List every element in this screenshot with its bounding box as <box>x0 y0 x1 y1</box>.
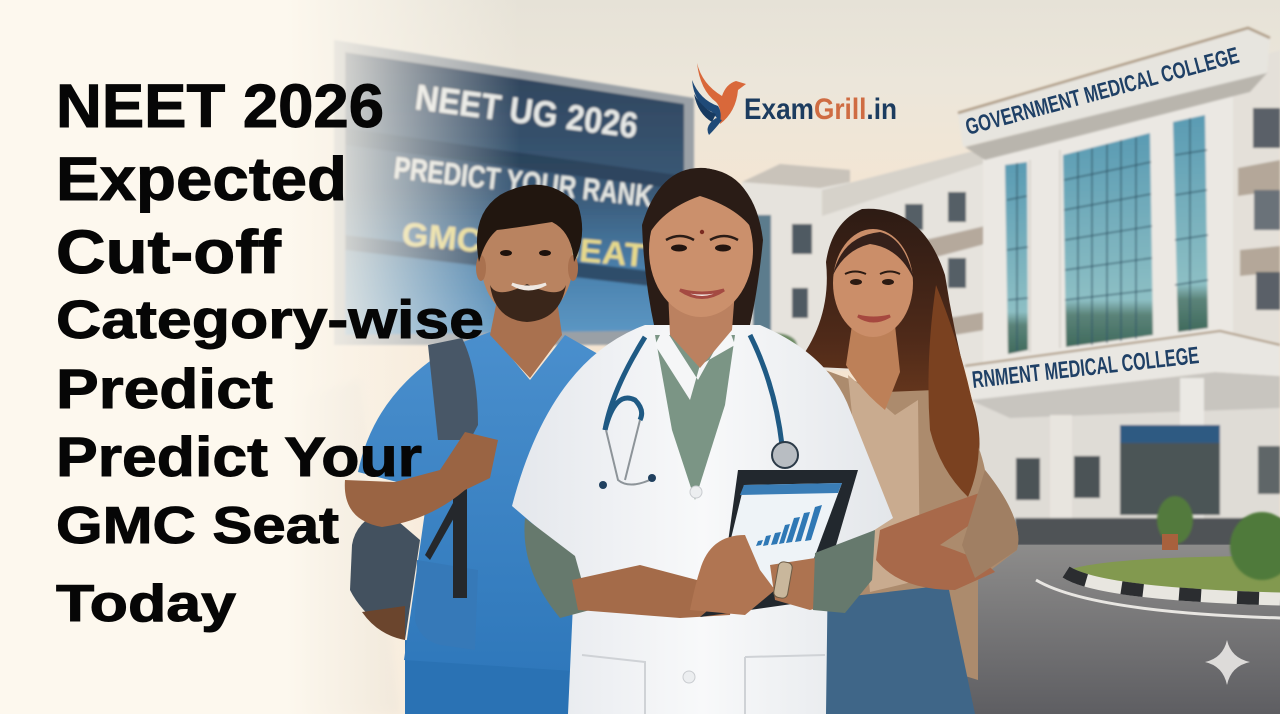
left wing <box>742 148 985 370</box>
road and garden <box>960 496 1280 714</box>
headline line 5: Predict <box>56 357 273 420</box>
neck <box>846 325 900 410</box>
headline line 4: Category-wise <box>56 290 484 350</box>
billboard text: GMC seat: GMC SEAT <box>400 215 647 274</box>
backpack <box>350 510 420 640</box>
sign band <box>958 28 1270 147</box>
crossed arms <box>876 490 995 590</box>
billboard text: predict your rank: PREDICT YOUR RANK <box>392 150 655 214</box>
head <box>649 183 753 317</box>
person: woman right <box>795 209 1018 714</box>
medical college building <box>742 28 1280 560</box>
right sleeve <box>813 530 875 613</box>
person: man left <box>345 185 640 714</box>
left sleeve <box>524 518 590 618</box>
headline line 6: Predict Your <box>56 425 422 488</box>
watch <box>773 561 793 599</box>
headline <box>56 72 484 633</box>
hair back <box>642 168 763 330</box>
person: centre doctor <box>512 168 893 714</box>
icon: phoenix bird <box>692 63 746 135</box>
jeans <box>815 585 975 714</box>
headline line 1: NEET 2026 <box>56 72 384 140</box>
headline line 3: Cut-off <box>56 218 282 286</box>
left cream fade <box>0 0 520 714</box>
arm and hand <box>345 432 498 527</box>
logo: ExamGrill.in <box>692 63 897 135</box>
headline line 2: Expected <box>56 145 347 213</box>
blurred billboard <box>334 40 694 345</box>
logo wordmark: ExamGrill.in <box>744 93 897 126</box>
shadow under sign band <box>965 72 1268 160</box>
coat pockets <box>582 655 825 714</box>
head <box>481 204 573 320</box>
icon: sparkle watermark <box>1205 640 1250 685</box>
tablet <box>700 470 858 617</box>
cardigan and top <box>815 370 1018 680</box>
scrub top <box>358 332 640 672</box>
headline line 8: Today <box>56 575 236 633</box>
main tower <box>958 28 1280 370</box>
coat buttons <box>690 486 702 498</box>
right forearm <box>770 556 846 610</box>
stethoscope <box>605 335 782 445</box>
entrance canopy <box>965 331 1280 560</box>
faded lower left background <box>280 380 400 714</box>
left forearm and hand <box>572 565 735 618</box>
neck <box>490 300 562 378</box>
shirt <box>655 335 735 500</box>
trousers <box>405 640 580 714</box>
white coat <box>512 325 893 714</box>
headline line 7: GMC Seat <box>56 497 339 555</box>
holding hand <box>690 535 775 615</box>
neck <box>668 290 735 368</box>
billboard text: NEET UG 2026: NEET UG 2026 <box>413 76 640 146</box>
face <box>833 229 913 337</box>
